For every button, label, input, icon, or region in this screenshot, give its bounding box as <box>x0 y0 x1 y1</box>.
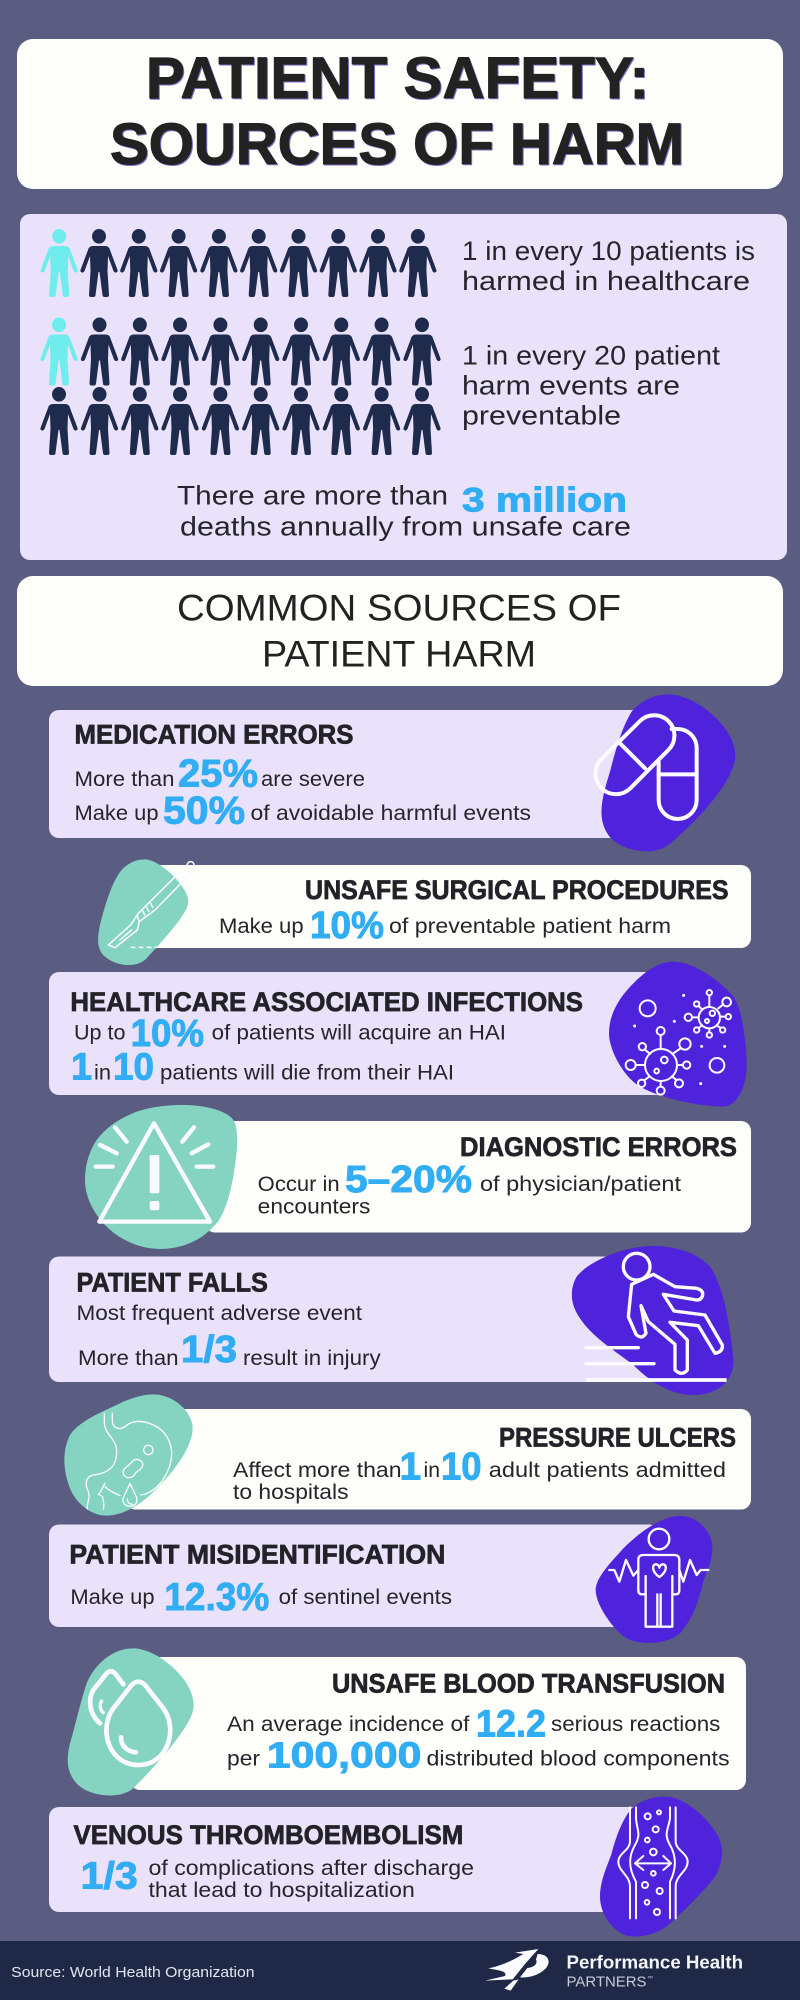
stat text: Occur in <box>258 1172 340 1196</box>
heading: PATIENT FALLS <box>76 1267 268 1297</box>
stat text: are severe <box>261 767 365 791</box>
callout: 3 million deaths <box>177 481 631 541</box>
panel: headline statistics <box>20 214 787 560</box>
icon: person falling <box>572 1246 733 1395</box>
stat text: 10 <box>113 1047 154 1089</box>
icon: scalpel <box>98 859 195 965</box>
stat text <box>76 1301 381 1371</box>
stat text: 10% <box>131 1013 204 1055</box>
title: PATIENT SAFETY: <box>146 46 649 111</box>
panel: unsafe blood transfusion <box>68 1648 746 1795</box>
heading: VENOUS THROMBOEMBOLISM <box>74 1820 463 1850</box>
stat text: of complications after discharge <box>148 1856 474 1880</box>
footer <box>0 1941 800 2000</box>
stat text: 1/3 <box>81 1856 138 1898</box>
stat text: to hospitals <box>233 1480 348 1504</box>
text: 1 in 20: 1 in every 20 patient <box>462 341 721 371</box>
stat text: in <box>94 1061 111 1085</box>
stat text: Make up <box>70 1585 155 1609</box>
title <box>110 46 684 177</box>
logo: Performance Health Partners: PARTNERS <box>566 1975 646 1991</box>
stat text: of patients will acquire an HAI <box>212 1021 506 1045</box>
heading: PATIENT MISIDENTIFICATION <box>69 1539 445 1569</box>
stat text <box>227 1703 730 1775</box>
logo: Performance Health Partners: Performance Health <box>566 1951 743 1972</box>
stat text: serious reactions <box>551 1712 720 1736</box>
stat text: 12.2 <box>476 1703 546 1745</box>
pictogram: 1 in 10 patients <box>41 229 436 297</box>
icon: person with heartbeat <box>596 1516 712 1643</box>
stat text: patients will die from their HAI <box>160 1061 454 1085</box>
stat text: result in injury <box>243 1346 381 1370</box>
logo: Performance Health Partners <box>485 1949 743 1991</box>
stat text: per <box>227 1746 260 1770</box>
heading: MEDICATION ERRORS <box>74 720 354 750</box>
stat text: 1 <box>400 1446 421 1488</box>
text: 1 in 20 <box>462 341 721 431</box>
callout: 3 million deaths: deaths annually from unsafe care <box>180 511 631 541</box>
stat text: 50% <box>163 789 245 832</box>
heading: UNSAFE BLOOD TRANSFUSION <box>332 1669 725 1699</box>
text: 1 in 10: 1 in every 10 patients is <box>462 236 755 266</box>
stat text: distributed blood components <box>426 1746 730 1770</box>
panel: patient falls <box>49 1246 733 1395</box>
stat text: 100,000 <box>267 1734 421 1775</box>
section heading panel <box>17 576 783 686</box>
stat text <box>219 905 671 947</box>
callout: 3 million deaths: 3 million <box>462 482 627 520</box>
title: SOURCES OF HARM <box>110 112 684 177</box>
stat text <box>81 1856 474 1902</box>
text: 1 in 20: preventable <box>462 401 621 431</box>
stat text: 10% <box>310 905 384 947</box>
icon: stomach ulcer <box>64 1394 193 1516</box>
stat text: 1/3 <box>181 1329 237 1371</box>
stat text: Affect more than <box>233 1458 402 1482</box>
stat text: encounters <box>258 1195 370 1219</box>
panel: patient misidentification <box>49 1516 712 1643</box>
panel: medication errors <box>49 694 735 851</box>
stat text: Up to <box>74 1021 126 1045</box>
heading: DIAGNOSTIC ERRORS <box>460 1132 737 1162</box>
panel: unsafe surgical procedures <box>98 859 751 965</box>
heading: UNSAFE SURGICAL PROCEDURES <box>305 875 729 905</box>
stat text: Make up <box>74 801 159 825</box>
stat text: that lead to hospitalization <box>148 1878 415 1902</box>
stat text: Most frequent adverse event <box>76 1301 362 1325</box>
stat text: 5–20% <box>345 1159 472 1201</box>
panel: venous thromboembolism <box>49 1797 722 1937</box>
stat text: 10 <box>441 1446 482 1488</box>
stat text: of sentinel events <box>279 1585 452 1609</box>
panel: pressure ulcers <box>64 1394 751 1516</box>
stat text <box>74 753 531 832</box>
pictogram: 1 in 20 patients <box>40 318 441 455</box>
section heading: PATIENT HARM <box>262 633 536 674</box>
stat text <box>258 1159 681 1219</box>
panel: healthcare associated infections <box>49 962 747 1107</box>
stat text: 12.3% <box>164 1576 269 1619</box>
stat text: An average incidence of <box>227 1712 469 1736</box>
callout: 3 million deaths: There are more than <box>177 481 448 511</box>
section heading <box>177 588 621 674</box>
stat text: in <box>424 1458 440 1482</box>
stat text: Make up <box>219 914 304 938</box>
logo: Performance Health Partners: ™ <box>647 1975 653 1982</box>
stat text: adult patients admitted <box>489 1458 726 1482</box>
stat text: More than <box>74 767 174 791</box>
icon: vein with clots <box>600 1797 722 1937</box>
stat text: of preventable patient harm <box>389 914 671 938</box>
stat text: of physician/patient <box>480 1172 681 1196</box>
section heading: COMMON SOURCES OF <box>177 588 621 628</box>
stat text: of avoidable harmful events <box>250 801 531 825</box>
heading: HEALTHCARE ASSOCIATED INFECTIONS <box>70 987 583 1017</box>
stat text: 1 <box>71 1047 92 1089</box>
text: 1 in 10: harmed in healthcare <box>462 266 750 296</box>
heading: PRESSURE ULCERS <box>499 1422 736 1452</box>
source note: Source: World Health Organization <box>11 1964 255 1981</box>
title panel <box>17 39 783 189</box>
icon: pills <box>595 694 735 851</box>
icon: warning triangle <box>85 1105 237 1249</box>
stat text: More than <box>78 1346 179 1370</box>
stat text <box>70 1576 452 1619</box>
icon: virus <box>609 962 747 1107</box>
stat text: 25% <box>178 753 258 796</box>
stat text <box>71 1013 506 1089</box>
text: 1 in 20: harm events are <box>462 370 680 400</box>
panel: diagnostic errors <box>85 1105 751 1249</box>
icon: blood drops <box>68 1648 194 1795</box>
text: 1 in 10 <box>462 236 755 296</box>
stat text <box>233 1446 726 1504</box>
